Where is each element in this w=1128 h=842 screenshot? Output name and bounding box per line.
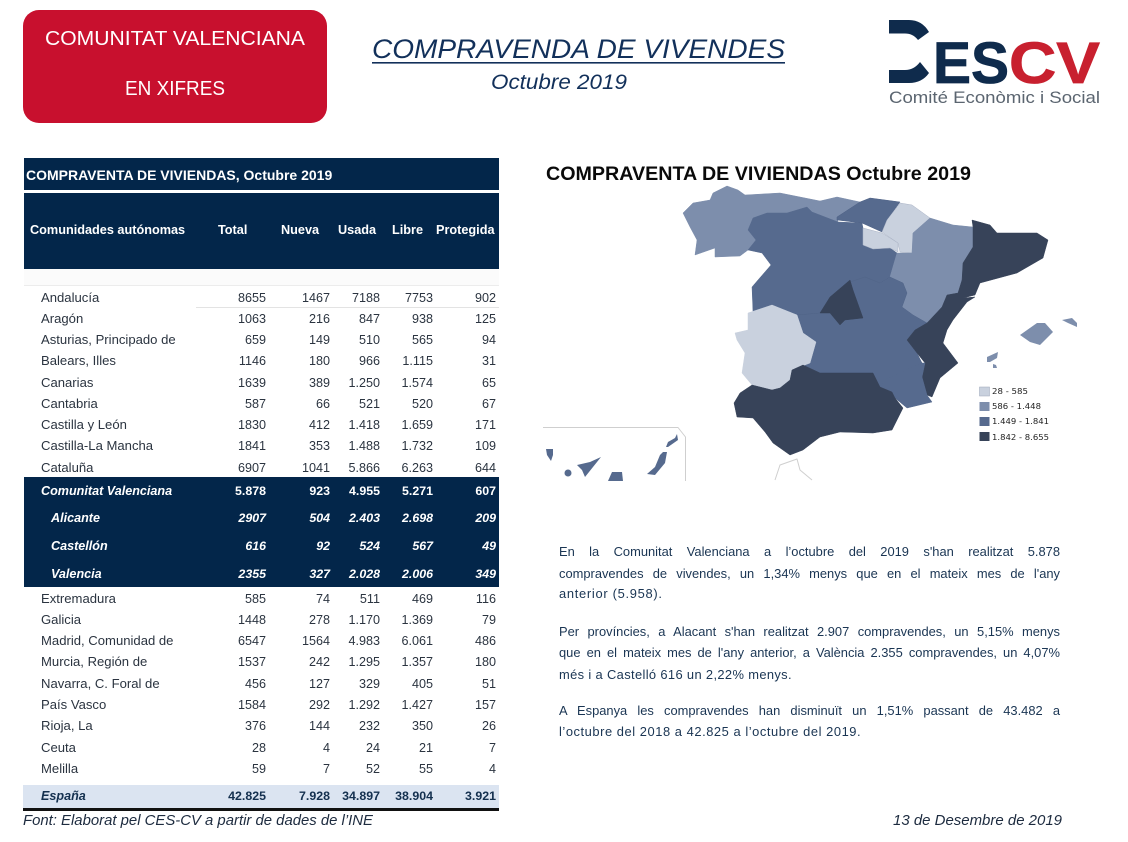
table rows: communities continued: Madrid, Comunidad de [41,633,173,648]
region: Castilla y León [748,207,897,315]
table rows: communities: 1.488 [348,439,380,453]
table rows: communities continued: 1.357 [401,655,433,669]
table rows: communities: 565 [412,333,433,347]
table rows: communities continued: 329 [359,677,380,691]
table rows: communities continued: 1564 [302,634,330,648]
region: Madrid [820,280,863,325]
table rows: communities continued: 511 [360,592,380,606]
table title bar [24,158,499,190]
total row: España: 38.904 [395,789,433,803]
region: Castilla-La Mancha [792,277,927,387]
table rows: communities continued: 232 [359,719,380,733]
table column header: Nueva [281,223,319,237]
table title bar: COMPRAVENTA DE VIVIENDAS, Octubre 2019 [26,167,332,183]
table rows: communities: Castilla y León [41,417,127,432]
table rows: communities continued: Extremadura [41,591,116,606]
table rows: communities continued: 278 [309,613,330,627]
table rows: communities: 1.732 [401,439,433,453]
table rows: communities: Castilla-La Mancha [41,438,153,453]
highlighted block: Comunitat Valenciana: 349 [475,567,496,581]
table rows: communities: 1830 [238,418,266,432]
total row: España: 34.897 [342,789,380,803]
highlighted block: Comunitat Valenciana: 504 [309,511,330,525]
map legend: 586 - 1.448 [992,402,1041,411]
region: La Rioja [863,228,898,252]
table rows: communities continued: 4.983 [348,634,380,648]
table rows: communities continued: 1584 [238,698,266,712]
highlighted block: Comunitat Valenciana: 2355 [238,567,266,581]
highlighted block: Comunitat Valenciana: 4.955 [349,484,380,498]
table rows: communities: 109 [475,439,496,453]
table rows: communities: 1467 [302,291,330,305]
table rows: communities: Balears, Illes [41,353,116,368]
region: Comunitat Valenciana [907,293,975,397]
map legend: 1.449 - 1.841 [992,417,1049,426]
region: Aragón [890,218,973,323]
table rows: communities continued: 242 [309,655,330,669]
table rows: communities [41,290,496,475]
highlighted block: Comunitat Valenciana: 616 [245,539,266,553]
table rows: communities: 6907 [238,461,266,475]
highlighted block: Comunitat Valenciana: 2.006 [402,567,433,581]
highlighted block: Comunitat Valenciana: 607 [475,484,496,498]
commentary text: En la Comunitat Valenciana a l’octubre del 2019 s'han realitzat 5.878 [559,544,1060,559]
table rows: communities continued: 1537 [238,655,266,669]
table rows: communities continued: 376 [245,719,266,733]
map legend: 28 - 585 [992,387,1028,396]
table rows: communities: 1041 [302,461,330,475]
region: Andalucía [734,365,903,455]
table column header: Comunidades autónomas [30,223,185,237]
region: Cataluña [958,220,1048,298]
source note: Font: Elaborat pel CES-CV a partir de dades de l’INE [23,812,374,829]
map legend: 1.842 - 8.655 [992,433,1049,442]
table rows: communities: 7188 [352,291,380,305]
table rows: communities continued: 1.427 [401,698,433,712]
table rows: communities continued: Melilla [41,761,78,776]
highlighted block: Comunitat Valenciana: Castellón [51,539,108,553]
table column header: Protegida [436,223,495,237]
table rows: communities: Andalucía [41,290,99,305]
red badge: Comunitat Valenciana en xifres: EN XIFRES [125,77,225,100]
table rows: communities: 1063 [238,312,266,326]
table rows: communities: 412 [309,418,330,432]
data table [23,158,499,811]
red badge: Comunitat Valenciana en xifres: COMUNITAT VALENCIANA [45,27,305,50]
table rows: communities: 902 [475,291,496,305]
table rows: communities continued: 116 [476,592,496,606]
table rows: communities: 938 [412,312,433,326]
table rows: communities continued: 59 [252,762,266,776]
table rows: communities continued: 585 [245,592,266,606]
table rows: communities continued: 350 [412,719,433,733]
table rows: communities: 389 [309,376,330,390]
table rows: communities: 149 [309,333,330,347]
table column header: Total [218,223,247,237]
table rows: communities: 510 [359,333,380,347]
table rows: communities: 587 [245,397,266,411]
table rows: communities continued: 6.061 [401,634,433,648]
table column header: Libre [392,223,423,237]
logo: CES CV: ES [933,31,1009,96]
table rows: communities: 67 [482,397,496,411]
table rows: communities continued: 127 [309,677,330,691]
highlighted block: Comunitat Valenciana: 2.698 [402,511,433,525]
commentary text: més i a Castelló 616 un 2,22% menys. [559,667,792,682]
region: Cantabria [812,197,860,222]
table rows: communities: 1639 [238,376,266,390]
highlighted block: Comunitat Valenciana: Alicante [51,511,100,525]
table rows: communities continued: 1.292 [348,698,380,712]
table rows: communities: 7753 [405,291,433,305]
table rows: communities continued: 26 [482,719,496,733]
region: Balears [987,318,1077,368]
logo: CES CV: CV [1009,31,1100,96]
commentary text: Per províncies, a Alacant s'han realitzat 2.907 compravendes, un 5,15% menys [559,624,1060,639]
highlighted block: Comunitat Valenciana: 2907 [238,511,266,525]
region: País Vasco [837,198,900,232]
Canary Islands inset frame [543,428,686,481]
total row: España: España [41,789,86,803]
table rows: communities continued: 486 [475,634,496,648]
table rows: communities: 1.574 [401,376,433,390]
highlighted block: Comunitat Valenciana: 5.878 [235,484,266,498]
region: Navarra [882,203,930,253]
highlighted block: Comunitat Valenciana: 2.403 [349,511,380,525]
table rows: communities continued: 469 [412,592,433,606]
table rows: communities: 520 [412,397,433,411]
commentary text: que en el mateix mes de l'any anterior, a València 2.355 compravendes, un 4,07% [559,645,1060,660]
table rows: communities: 1146 [239,354,266,368]
commentary text: compravendes de vivendes, un 1,34% menys que en el mateix mes de l'any [559,566,1060,581]
table rows: communities continued: Ceuta [41,740,76,755]
table rows: communities continued: 7 [323,762,330,776]
highlighted block: Comunitat Valenciana: 567 [412,539,433,553]
table rows: communities: 1.115 [402,354,433,368]
region: Canarias [546,434,678,481]
table rows: communities continued: 405 [412,677,433,691]
table rows: communities continued: Galicia [41,612,81,627]
commentary text: l’octubre del 2018 a 42.825 a l’octubre del 2019. [559,724,861,739]
table rows: communities continued: 1.295 [348,655,380,669]
table rows: communities continued: 1.369 [401,613,433,627]
table rows: communities: 966 [359,354,380,368]
table column header: Usada [338,223,376,237]
table rows: communities continued: Rioja, La [41,718,93,733]
date: 13 de Desembre de 2019 [893,812,1063,829]
highlighted block: Comunitat Valenciana: Comunitat Valenciana [41,484,172,498]
table rows: communities: 216 [309,312,330,326]
table rows: communities: 847 [359,312,380,326]
highlighted block: Comunitat Valenciana: 327 [309,567,330,581]
table rows: communities continued: 6547 [238,634,266,648]
logo: CES CV [889,20,1100,107]
table rows: communities continued: 1448 [238,613,266,627]
table rows: communities continued: 51 [482,677,496,691]
table rows: communities continued: 180 [475,655,496,669]
total row: España [23,785,499,811]
highlighted block: Comunitat Valenciana: Valencia [51,567,102,581]
highlighted block: Comunitat Valenciana: 209 [475,511,496,525]
table rows: communities continued: 456 [245,677,266,691]
title: Octubre 2019 [491,71,627,94]
table rows: communities: 1.418 [348,418,380,432]
table rows: communities continued: 55 [419,762,433,776]
total row: España: 3.921 [465,789,496,803]
table rows: communities continued: 144 [309,719,330,733]
table rows: communities continued: 4 [323,741,330,755]
table rows: communities continued: Navarra, C. Foral de [41,676,160,691]
map heading: COMPRAVENTA DE VIVIENDAS Octubre 2019 [546,163,971,185]
table rows: communities: 353 [309,439,330,453]
logo: CES CV: Comité Econòmic i Social [889,88,1100,107]
table rows: communities continued: 21 [419,741,433,755]
table rows: communities: 94 [482,333,496,347]
highlighted block: Comunitat Valenciana [24,477,499,587]
table rows: communities: Canarias [41,375,93,390]
table column header [24,193,499,269]
table rows: communities: 1.659 [401,418,433,432]
region: Asturias [745,193,820,218]
table rows: communities: 8655 [238,291,266,305]
table rows: communities continued: 74 [316,592,330,606]
total row: España: 42.825 [228,789,266,803]
region: Extremadura [735,305,816,390]
total row: España: 7.928 [299,789,330,803]
table rows: communities continued: 292 [309,698,330,712]
table rows: communities: 125 [475,312,496,326]
table rows: communities continued: 1.170 [348,613,380,627]
region: Galicia [683,186,756,257]
table rows: communities continued: Murcia, Región de [41,654,147,669]
table rows: communities: Asturias, Principado de [41,332,176,347]
table rows: communities continued: 28 [252,741,266,755]
table rows: communities: 31 [482,354,496,368]
table rows: communities: 65 [482,376,496,390]
highlighted block: Comunitat Valenciana: 49 [482,539,496,553]
title [372,34,785,94]
highlighted block: Comunitat Valenciana: 5.271 [402,484,433,498]
commentary text: anterior (5.958). [559,586,663,601]
table rows: communities continued [41,591,496,776]
highlighted block: Comunitat Valenciana: 923 [309,484,330,498]
title: COMPRAVENDA DE VIVENDES [372,34,785,64]
highlighted block: Comunitat Valenciana: 92 [316,539,330,553]
table rows: communities: Cataluña [41,460,93,475]
table rows: communities: 5.866 [348,461,380,475]
table rows: communities continued: 157 [475,698,496,712]
table rows: communities: 180 [309,354,330,368]
highlighted block: Comunitat Valenciana: 2.028 [349,567,380,581]
table rows: communities continued: 4 [489,762,496,776]
table rows: communities: 1.250 [348,376,380,390]
table rows: communities: Cantabria [41,396,98,411]
highlighted block: Comunitat Valenciana: 524 [359,539,380,553]
table rows: communities: 6.263 [401,461,433,475]
region: Murcia [880,363,932,408]
Ceuta and Melilla outline [775,459,812,480]
red badge: Comunitat Valenciana en xifres [23,10,327,123]
table rows: communities: 171 [475,418,496,432]
table rows: communities continued: 52 [366,762,380,776]
table rows: communities: 1841 [238,439,266,453]
table rows: communities: 644 [475,461,496,475]
table rows: communities continued: 7 [489,741,496,755]
table rows: communities continued: 79 [482,613,496,627]
table rows: communities continued: 24 [366,741,380,755]
table rows: communities: Aragón [41,311,83,326]
table rows: communities: 659 [245,333,266,347]
table rows: communities: 521 [359,397,380,411]
table rows: communities continued: País Vasco [41,697,106,712]
commentary text: A Espanya les compravendes han disminuït un 1,51% passant de 43.482 a [559,703,1060,718]
table rows: communities: 66 [316,397,330,411]
